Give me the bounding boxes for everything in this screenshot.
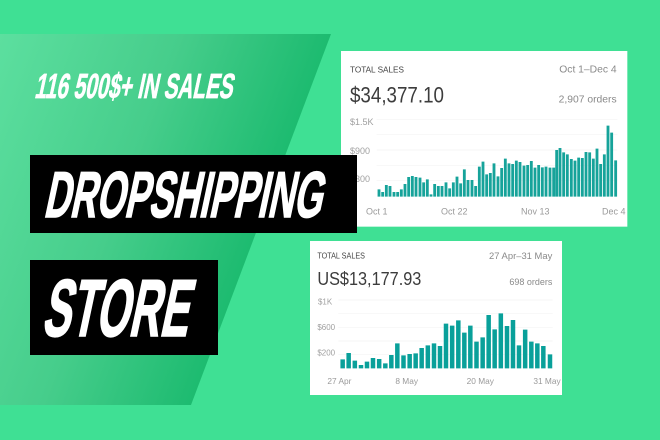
x axis labels (366, 207, 625, 217)
x axis labels: Oct 1 (366, 207, 387, 217)
y axis labels (350, 117, 373, 184)
x axis labels: 20 May (467, 376, 495, 386)
y axis labels: $300 (350, 174, 370, 184)
y axis labels: $1.5K (350, 117, 373, 127)
x axis labels: Nov 13 (521, 207, 549, 217)
bar chart (343, 313, 550, 368)
x axis labels: Dec 4 (602, 207, 625, 217)
card title: TOTAL SALES (350, 65, 404, 75)
sales card: Oct 1 to Dec 4 (341, 51, 627, 227)
bar chart (379, 126, 616, 197)
total amount: US$13,177.93 (317, 268, 421, 289)
x axis labels: 27 Apr (327, 376, 352, 386)
headline: sales total: 116 500$+ IN SALES (32, 67, 239, 106)
order count: 698 orders (509, 277, 553, 287)
title text: dropshipping: DROPSHIPPING (40, 158, 334, 231)
total amount: $34,377.10 (350, 83, 444, 108)
x axis labels: 8 May (395, 376, 419, 386)
green slanted panel (0, 34, 331, 405)
x axis labels: 31 May (533, 376, 561, 386)
date range: Oct 1–Dec 4 (559, 65, 617, 76)
title text: store: STORE (37, 264, 202, 354)
y axis labels: $600 (317, 323, 336, 332)
y axis labels: $900 (350, 146, 370, 156)
x axis labels (327, 376, 561, 386)
y axis labels: $1K (318, 298, 333, 307)
order count: 2,907 orders (559, 95, 617, 106)
sales card: 27 Apr to 31 May (310, 241, 562, 395)
date range: 27 Apr–31 May (489, 251, 553, 261)
card title: TOTAL SALES (317, 252, 365, 261)
x axis labels: Oct 22 (441, 207, 467, 217)
y axis labels (317, 298, 336, 357)
title box: dropshipping (30, 155, 357, 233)
title box: store (30, 260, 218, 355)
y axis labels: $200 (317, 348, 336, 357)
